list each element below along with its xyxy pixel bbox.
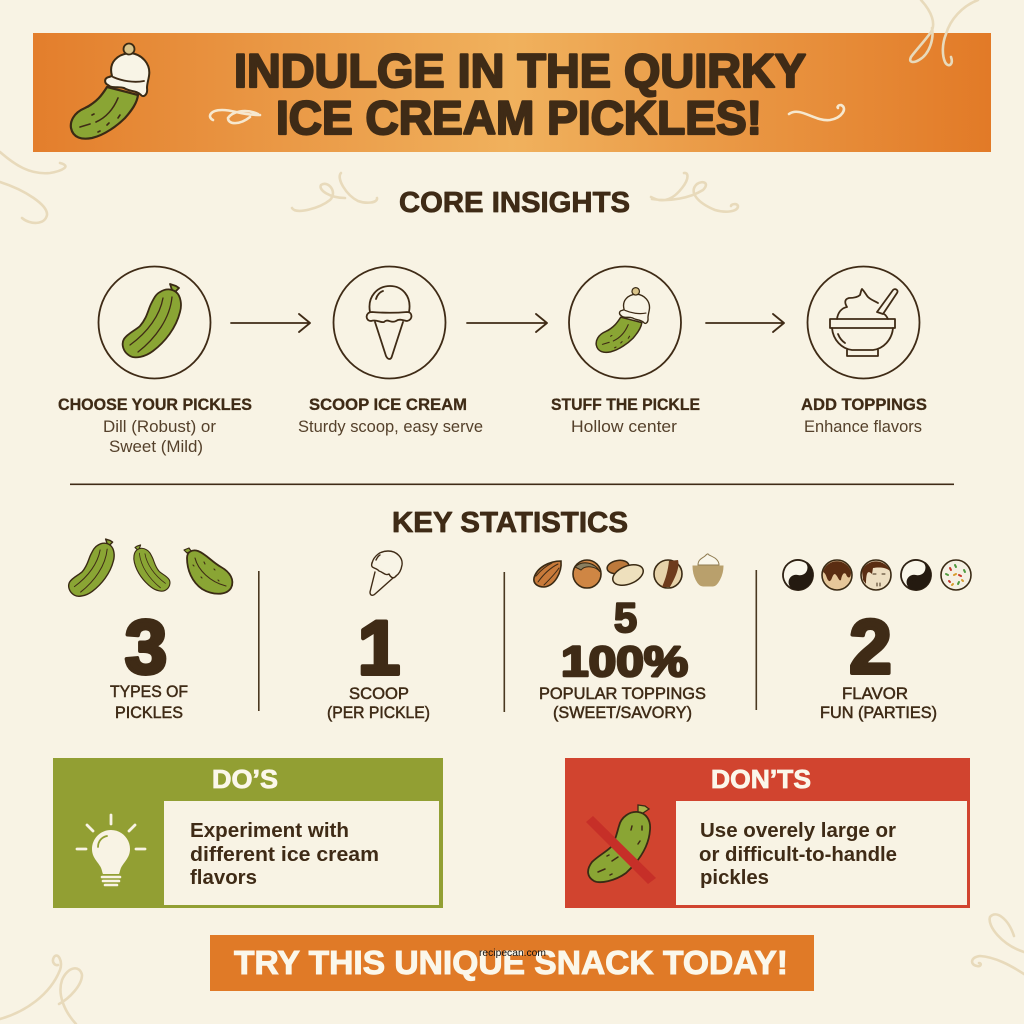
label: (SWEET/SAVORY): [553, 704, 692, 722]
number 5: 5: [614, 594, 637, 641]
icon: crossed-out pickle: [586, 805, 656, 884]
watermark: recipecan.com: [479, 947, 546, 959]
title text: ICE CREAM PICKLES!: [276, 91, 762, 144]
step 3: stuff the pickle: [551, 266, 700, 436]
label: [110, 683, 188, 722]
do's text: flavors: [190, 867, 257, 889]
icon: bowl with whipped topping: [830, 289, 898, 356]
label: SCOOP: [349, 685, 409, 703]
icon: pickle: [123, 284, 181, 357]
don'ts text: or difficult-to-handle: [699, 844, 897, 866]
title text: INDULGE IN THE QUIRKY: [234, 44, 806, 97]
heading: key statistics: KEY STATISTICS: [392, 507, 628, 539]
icon row: flavors: [780, 557, 971, 593]
step 4 text: Enhance flavors: [804, 418, 922, 436]
label: TYPES OF: [110, 683, 188, 701]
step 2: scoop ice cream: [298, 266, 483, 436]
step 3 text: [551, 396, 700, 436]
don'ts text: Use overely large or: [700, 820, 896, 842]
do's text: [190, 820, 379, 889]
arrow 2: [467, 314, 547, 332]
arrow 3: [706, 314, 784, 332]
number 3: 3: [125, 605, 167, 690]
step 4 text: ADD TOPPINGS: [801, 396, 927, 414]
number 2: 2: [849, 605, 892, 690]
label: PICKLES: [115, 704, 183, 722]
icon: three pickles: [69, 539, 232, 596]
call to action banner: TRY THIS UNIQUE SNACK TODAY!: [234, 944, 788, 981]
step 2 text: [298, 396, 483, 436]
step 1 text: Dill (Robust) or: [103, 418, 217, 436]
step 1 text: [58, 396, 252, 456]
heading: do's: DO’S: [212, 764, 278, 794]
step 1 text: CHOOSE YOUR PICKLES: [58, 396, 252, 414]
stat: 2 flavor fun: [780, 557, 971, 722]
panel: don'ts: [565, 758, 970, 908]
number 1: 1: [358, 606, 400, 691]
icon row: toppings: [534, 554, 723, 589]
arrow 1: [231, 314, 310, 332]
step 1: choose your pickles: [58, 266, 252, 456]
number 100%: 100%: [561, 638, 688, 686]
step 2 text: Sturdy scoop, easy serve: [298, 418, 483, 436]
label: FUN (PARTIES): [820, 704, 937, 722]
icon: ice cream cone: [367, 286, 412, 359]
do's text: Experiment with: [190, 820, 349, 842]
label: FLAVOR: [842, 685, 908, 703]
label: (PER PICKLE): [327, 704, 430, 722]
icon: lightbulb: [77, 815, 145, 885]
label: POPULAR TOPPINGS: [539, 685, 706, 703]
step 4: add toppings: [801, 266, 927, 436]
stat: 5 / 100% popular toppings: [534, 554, 723, 722]
heading: core insights: CORE INSIGHTS: [399, 187, 630, 219]
icon: small ice cream cone: [370, 551, 402, 595]
panel: do's: [53, 758, 443, 908]
icon: pickle with ice cream scoop: [71, 44, 149, 139]
stat: 1 scoop per pickle: [327, 551, 430, 722]
don'ts text: [699, 820, 897, 889]
do's text: different ice cream: [190, 844, 379, 866]
heading: don'ts: DON’TS: [711, 764, 811, 794]
label: [327, 685, 430, 722]
step 2 text: SCOOP ICE CREAM: [309, 396, 467, 414]
step 3 text: STUFF THE PICKLE: [551, 396, 700, 414]
label: [820, 685, 937, 722]
step 3 text: Hollow center: [571, 418, 678, 436]
step 4 text: [801, 396, 927, 436]
icon: stuffed pickle: [596, 288, 650, 352]
don'ts text: pickles: [700, 867, 769, 889]
step 1 text: Sweet (Mild): [109, 438, 203, 456]
call to action banner: [210, 935, 814, 991]
stat: 3 types of pickles: [69, 539, 232, 722]
title banner: [33, 33, 991, 152]
label: [539, 685, 706, 722]
title text: [234, 44, 806, 144]
